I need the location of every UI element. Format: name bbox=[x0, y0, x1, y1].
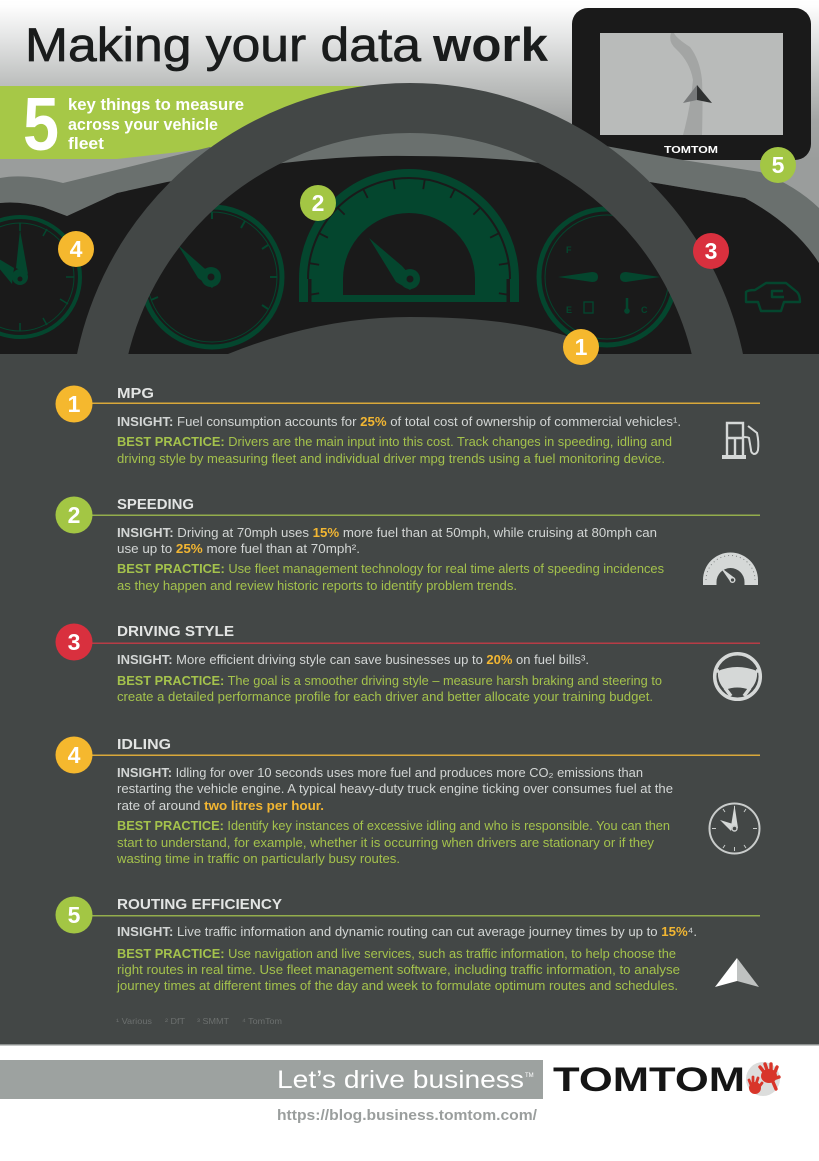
dashboard number badges: 1 bbox=[575, 334, 588, 360]
section: speeding bbox=[56, 496, 760, 593]
icon: navigation arrow bbox=[715, 958, 759, 987]
section: routing efficiency: ROUTING EFFICIENCY bbox=[117, 896, 282, 913]
icon: speedometer bbox=[703, 552, 758, 585]
section: idling: 4 bbox=[68, 742, 81, 768]
dashboard number badges: 5 bbox=[772, 152, 785, 178]
gauge: fuel and temperature: F bbox=[566, 245, 572, 255]
footnotes: ² DfT bbox=[165, 1017, 185, 1026]
section: idling: INSIGHT: Idling for over 10 seconds uses more fuel and produces more CO₂ emissions than bbox=[117, 766, 643, 780]
subtitle banner: fleet bbox=[68, 134, 104, 153]
TomTom logo: TOMTOM bbox=[553, 1061, 745, 1099]
dashboard upper trim bbox=[0, 133, 819, 262]
subtitle banner: across your vehicle bbox=[68, 115, 218, 134]
section: driving style: DRIVING STYLE bbox=[117, 623, 234, 640]
section: driving style: create a detailed performance profile for each driver and better allocate your training budget. bbox=[117, 690, 653, 704]
icon: fuel pump bbox=[722, 423, 758, 459]
section: speeding: 2 bbox=[68, 502, 80, 528]
dashboard number badges bbox=[58, 147, 796, 365]
section: idling: BEST PRACTICE: Identify key instances of excessive idling and who is responsible. You can then bbox=[117, 819, 670, 833]
subtitle banner: 5 bbox=[23, 82, 59, 166]
subtitle banner: key things to measure bbox=[68, 95, 244, 114]
section: routing efficiency: 5 bbox=[68, 902, 81, 928]
navigation device bbox=[572, 8, 811, 160]
lower panel bbox=[0, 354, 819, 1044]
steering wheel hub bbox=[228, 317, 592, 354]
section: speeding: BEST PRACTICE: Use fleet management technology for real time alerts of speeding incidences bbox=[117, 562, 664, 576]
footer strapline bar: Let’s drive business bbox=[277, 1066, 524, 1094]
section: idling: wasting time in traffic on particularly busy routes. bbox=[116, 852, 400, 866]
title: work bbox=[432, 19, 549, 72]
steering wheel rim bbox=[95, 108, 725, 738]
section: MPG: driving style by measuring fleet and individual driver mpg trends using a fuel monitoring device. bbox=[117, 452, 665, 466]
gauge: speedometer bbox=[299, 169, 519, 302]
gauge: fuel and temperature: C bbox=[641, 305, 648, 315]
section: MPG bbox=[56, 385, 760, 466]
section: driving style: BEST PRACTICE: The goal is a smoother driving style – measure harsh braking and steering to bbox=[117, 674, 662, 688]
gauge: clock bbox=[0, 217, 80, 337]
section: idling: start to understand, for example, whether it is occurring when drivers are stationary or if they bbox=[117, 836, 655, 850]
gauge: fuel and temperature bbox=[539, 209, 675, 345]
section: idling: IDLING bbox=[117, 736, 171, 753]
navigation device: TOMTOM bbox=[664, 144, 718, 156]
dashboard number badges: 2 bbox=[312, 190, 324, 216]
footnotes bbox=[116, 1017, 282, 1026]
gauge: fuel and temperature: E bbox=[566, 305, 572, 315]
engine warning icon bbox=[746, 283, 800, 311]
icon: red hands bbox=[749, 1064, 779, 1094]
section: idling bbox=[56, 736, 760, 866]
section: driving style: 3 bbox=[68, 629, 80, 655]
section: idling: restarting the vehicle engine. A typical heavy-duty truck engine ticking over consumes fuel at the bbox=[117, 782, 673, 796]
gauge: rev counter bbox=[142, 207, 282, 347]
title: Making your data bbox=[25, 19, 422, 72]
section: driving style bbox=[56, 623, 760, 704]
section: idling: rate of around two litres per hour. bbox=[117, 799, 324, 813]
section: MPG: INSIGHT: Fuel consumption accounts for 25% of total cost of ownership of commercial vehicles¹. bbox=[117, 415, 681, 429]
section: routing efficiency: right routes in real time. Use fleet management software, including traffic information, to analyse bbox=[117, 963, 680, 977]
section: routing efficiency: INSIGHT: Live traffic information and dynamic routing can cut average journey times by up to 15%⁴. bbox=[117, 925, 697, 939]
section: driving style: INSIGHT: More efficient driving style can save businesses up to 20% on fuel bills³. bbox=[117, 653, 589, 667]
section: MPG: 1 bbox=[68, 391, 81, 417]
section: speeding: SPEEDING bbox=[117, 496, 194, 513]
section: MPG: MPG bbox=[117, 385, 154, 402]
section: MPG: BEST PRACTICE: Drivers are the main input into this cost. Track changes in speeding, idling and bbox=[117, 435, 672, 449]
footer strapline bar: TM bbox=[525, 1073, 534, 1079]
website url: https://blog.business.tomtom.com/ bbox=[277, 1107, 538, 1124]
section: routing efficiency: BEST PRACTICE: Use navigation and live services, such as traffic information, to help choose the bbox=[117, 947, 676, 961]
dashboard number badges: 4 bbox=[70, 236, 83, 262]
TomTom logo bbox=[553, 1061, 780, 1099]
header background bbox=[0, 0, 819, 360]
dashboard black panel bbox=[0, 156, 819, 354]
section: routing efficiency bbox=[56, 896, 760, 993]
icon: steering wheel bbox=[715, 654, 760, 699]
subtitle banner bbox=[0, 82, 370, 166]
section: speeding: use up to 25% more fuel than at 70mph². bbox=[117, 542, 360, 556]
section: speeding: as they happen and review historic reports to identify problem trends. bbox=[117, 579, 517, 593]
footer strapline bar bbox=[0, 1060, 543, 1099]
footnotes: ³ SMMT bbox=[197, 1017, 229, 1026]
title bbox=[25, 19, 549, 72]
footnotes: ¹ Various bbox=[116, 1017, 152, 1026]
footnotes: ⁴ TomTom bbox=[242, 1017, 282, 1026]
section: routing efficiency: journey times at different times of the day and week to formulate optimum routes and schedules. bbox=[116, 979, 678, 993]
section: speeding: INSIGHT: Driving at 70mph uses 15% more fuel than at 50mph, while cruising at 80mph can bbox=[117, 526, 657, 540]
icon: clock bbox=[710, 804, 760, 854]
dashboard number badges: 3 bbox=[705, 238, 717, 264]
